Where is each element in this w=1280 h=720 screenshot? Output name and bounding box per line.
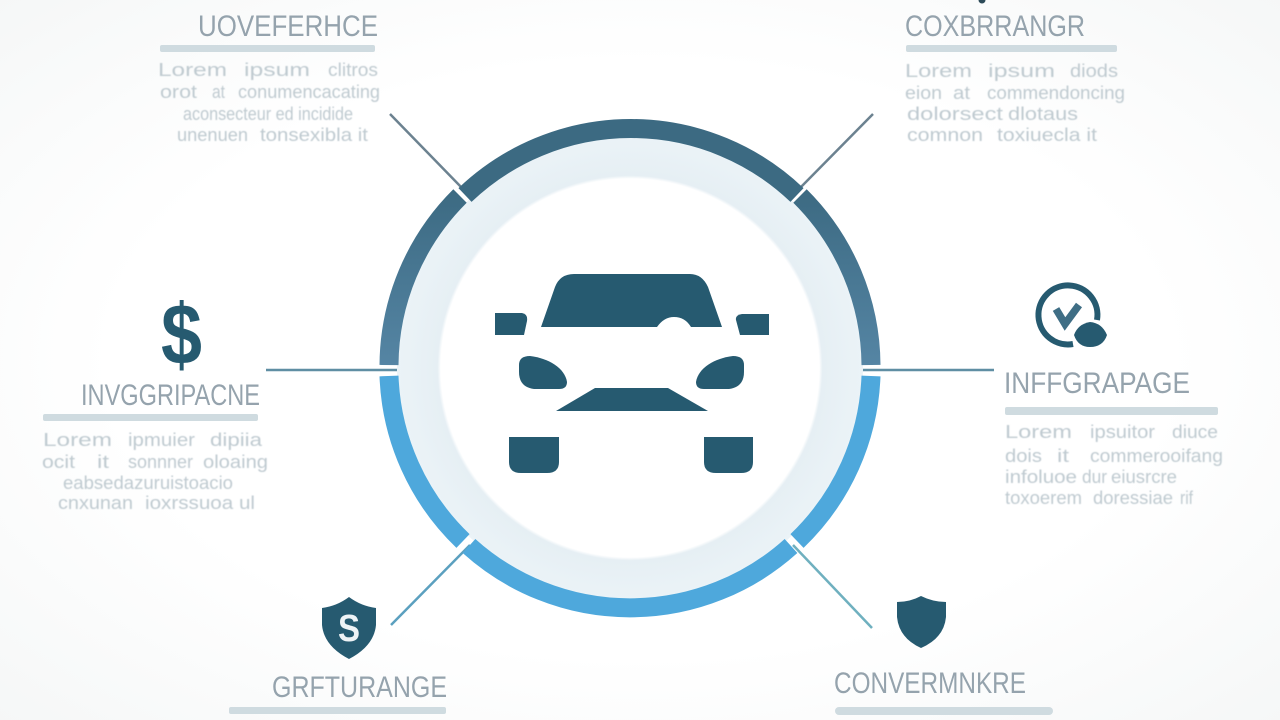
icon: car front bbox=[495, 274, 769, 473]
text block: eabsedazuruistoacio bbox=[63, 473, 233, 493]
text block: infoluoe bbox=[1005, 467, 1077, 487]
text block: conumencacating bbox=[238, 82, 380, 102]
panel: left bbox=[42, 287, 268, 513]
text block: dlotaus bbox=[1008, 104, 1078, 124]
text block: dipiia bbox=[210, 430, 263, 450]
panel: top left bbox=[158, 10, 380, 145]
heading: GRFTURANGE bbox=[272, 671, 447, 704]
dot bbox=[978, 0, 986, 4]
text block: at bbox=[212, 82, 225, 102]
text block bbox=[158, 60, 380, 145]
text block: ioxrssuoa ul bbox=[145, 493, 255, 513]
text block: tonsexibla it bbox=[260, 125, 368, 145]
text block: clitros bbox=[328, 60, 378, 80]
icon: shield with dollar bbox=[322, 597, 376, 659]
text block bbox=[1005, 422, 1223, 508]
text block: Lorem bbox=[43, 430, 112, 450]
text block bbox=[42, 430, 268, 513]
icon: shield with dollar: S bbox=[338, 608, 360, 650]
text block: Lorem bbox=[158, 60, 227, 80]
text block: ipmuier bbox=[128, 430, 195, 450]
heading: INVGGRIPACNE bbox=[81, 379, 260, 412]
text block: ipsum bbox=[244, 60, 310, 80]
text block: diuce bbox=[1172, 422, 1218, 442]
text block: orot bbox=[160, 82, 197, 102]
text block: oloaing bbox=[203, 452, 268, 472]
text block: unenuen bbox=[177, 125, 248, 145]
text block: diods bbox=[1070, 61, 1118, 81]
heading: CONVERMNKRE bbox=[834, 667, 1026, 700]
text block: cnxunan bbox=[58, 493, 133, 513]
panel: bottom right bbox=[834, 596, 1053, 715]
text block: dur bbox=[1082, 467, 1107, 487]
central ring bbox=[389, 129, 871, 608]
text block: dolorsect bbox=[907, 104, 1003, 124]
icon: shield bbox=[897, 596, 946, 648]
text block: ipsuitor bbox=[1090, 422, 1155, 442]
text block: aconsecteur ed incidide bbox=[183, 104, 353, 124]
panel: top right bbox=[905, 0, 1125, 145]
text block bbox=[905, 61, 1125, 145]
heading: INFFGRAPAGE bbox=[1004, 367, 1190, 400]
text block: commendoncing bbox=[987, 83, 1125, 103]
text block: dois bbox=[1005, 446, 1042, 466]
panel: bottom left bbox=[229, 597, 447, 714]
text block: ocit bbox=[42, 452, 75, 472]
text block: rif bbox=[1180, 488, 1194, 508]
text block: toxiuecla it bbox=[997, 125, 1097, 145]
text block: eiusrcre bbox=[1111, 467, 1177, 487]
text block: at bbox=[953, 83, 970, 103]
text block: commerooifang bbox=[1090, 446, 1223, 466]
text block: Lorem bbox=[905, 61, 972, 81]
text block: ipsum bbox=[988, 61, 1055, 81]
connector lines bbox=[266, 114, 994, 628]
text block: toxoerem bbox=[1005, 488, 1082, 508]
panel: right bbox=[1004, 285, 1223, 508]
text block: doressiae bbox=[1093, 488, 1173, 508]
text block: comnon bbox=[907, 125, 983, 145]
text block: eion bbox=[905, 83, 942, 103]
text block: it bbox=[1057, 446, 1069, 466]
text block: sonnner bbox=[128, 452, 193, 472]
icon: dollar sign: $ bbox=[161, 287, 202, 383]
heading: COXBRRANGR bbox=[905, 10, 1085, 43]
heading: UOVEFERHCE bbox=[198, 10, 378, 43]
text block: it bbox=[97, 452, 109, 472]
text block: Lorem bbox=[1005, 422, 1072, 442]
icon: check badge bbox=[1038, 285, 1107, 347]
